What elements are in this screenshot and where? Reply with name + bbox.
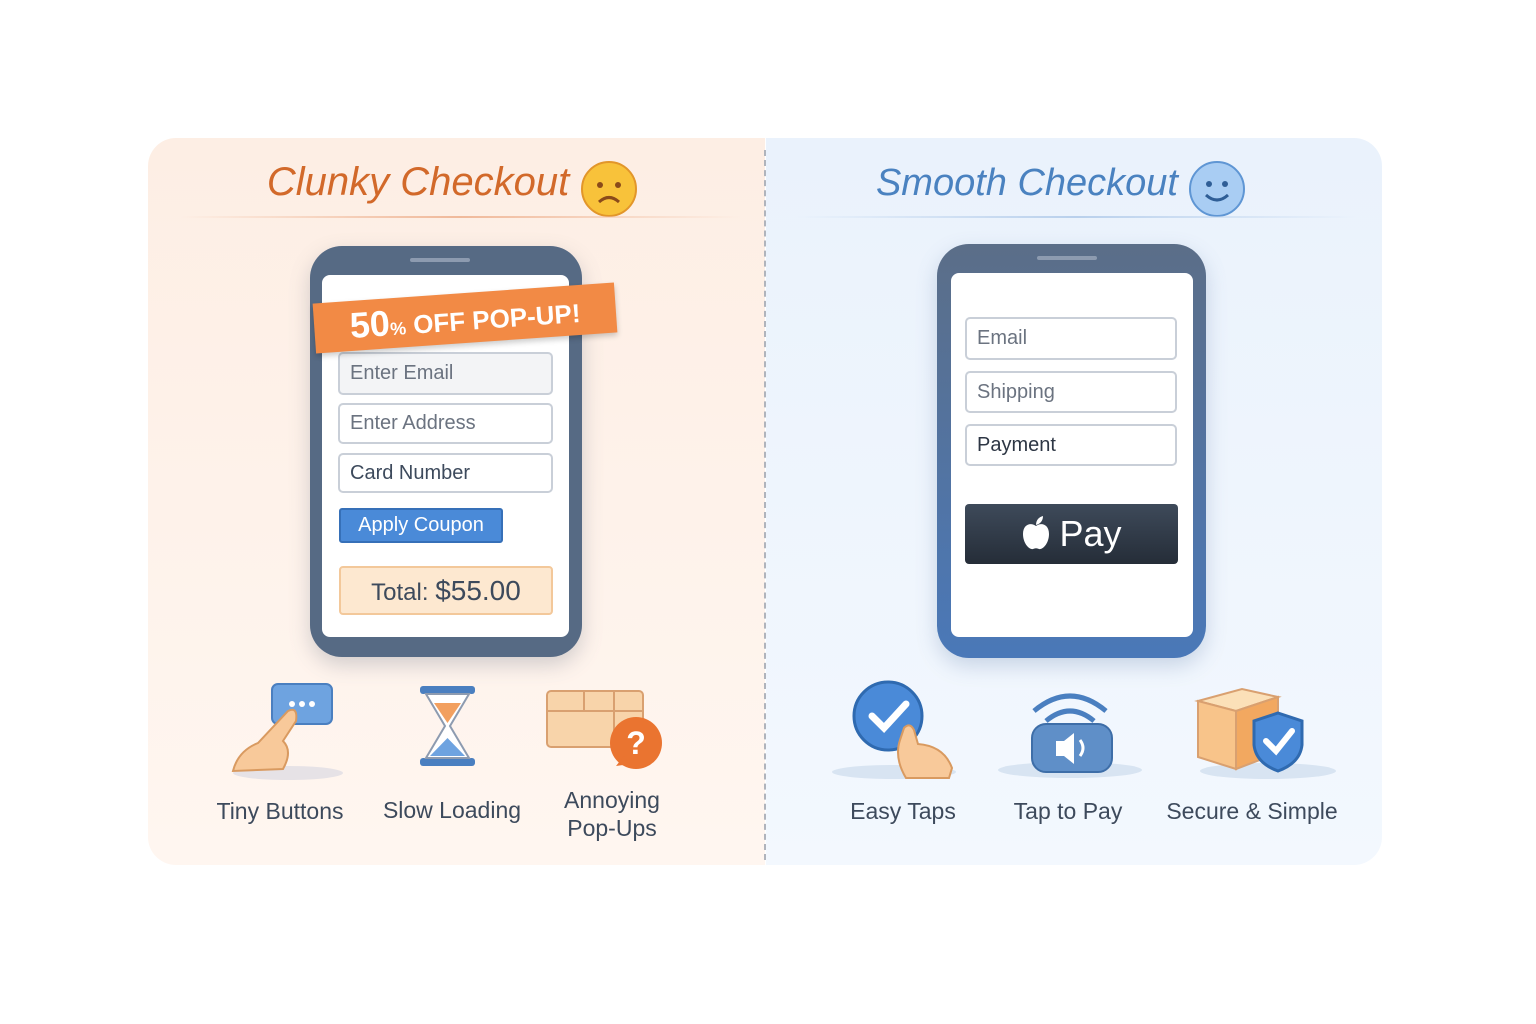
icon: sad face bbox=[581, 161, 637, 217]
icon: annoying pop-ups bbox=[546, 690, 662, 769]
label: annoying pop-ups: Annoying bbox=[564, 787, 660, 813]
label: slow loading: Slow Loading bbox=[383, 797, 521, 823]
button: apple pay bbox=[965, 504, 1178, 564]
panel: clunky checkout bbox=[148, 138, 765, 865]
phone: smooth bbox=[937, 244, 1206, 658]
input: payment: Payment bbox=[977, 434, 1056, 456]
button: apply coupon: Apply Coupon bbox=[358, 514, 484, 536]
phone: clunky bbox=[310, 246, 582, 657]
input: email bbox=[965, 317, 1177, 360]
input: shipping bbox=[965, 371, 1177, 413]
icon: secure box bbox=[1194, 688, 1336, 779]
total box bbox=[339, 566, 553, 615]
icon: happy face bbox=[1189, 161, 1245, 217]
icon: hourglass bbox=[420, 686, 475, 766]
label: tiny buttons: Tiny Buttons bbox=[216, 798, 343, 824]
input: email: Email bbox=[977, 327, 1027, 349]
label: annoying pop-ups: Pop-Ups bbox=[567, 815, 657, 841]
icon: tiny buttons bbox=[232, 683, 343, 780]
label: annoying pop-ups bbox=[564, 787, 660, 841]
input: enter email: Enter Email bbox=[350, 362, 453, 384]
input: enter email bbox=[338, 352, 553, 395]
divider bbox=[764, 150, 766, 860]
icon: tap to pay bbox=[998, 693, 1142, 778]
title: smooth checkout: Smooth Checkout bbox=[876, 162, 1178, 204]
input: card number bbox=[338, 453, 553, 493]
input: enter address bbox=[338, 403, 553, 444]
input: enter address: Enter Address bbox=[350, 412, 476, 434]
button: apply coupon bbox=[339, 508, 503, 543]
button: apple pay: Pay bbox=[1059, 513, 1122, 554]
label: tap to pay: Tap to Pay bbox=[1014, 798, 1122, 824]
title: clunky checkout: Clunky Checkout bbox=[267, 160, 569, 204]
label: secure & simple: Secure & Simple bbox=[1166, 798, 1338, 824]
input: payment bbox=[965, 424, 1177, 466]
input: shipping: Shipping bbox=[977, 380, 1055, 402]
label: easy taps: Easy Taps bbox=[850, 798, 956, 824]
total box: Total: $55.00 bbox=[371, 575, 521, 606]
banner: 50% off pop-up bbox=[313, 283, 617, 353]
icon: easy taps bbox=[832, 680, 956, 779]
icon: annoying pop-ups: ? bbox=[626, 725, 646, 761]
panel: smooth checkout bbox=[766, 138, 1382, 865]
banner: 50% off pop-up: 50% OFF POP-UP! bbox=[348, 298, 581, 346]
input: card number: Card Number bbox=[350, 462, 470, 484]
